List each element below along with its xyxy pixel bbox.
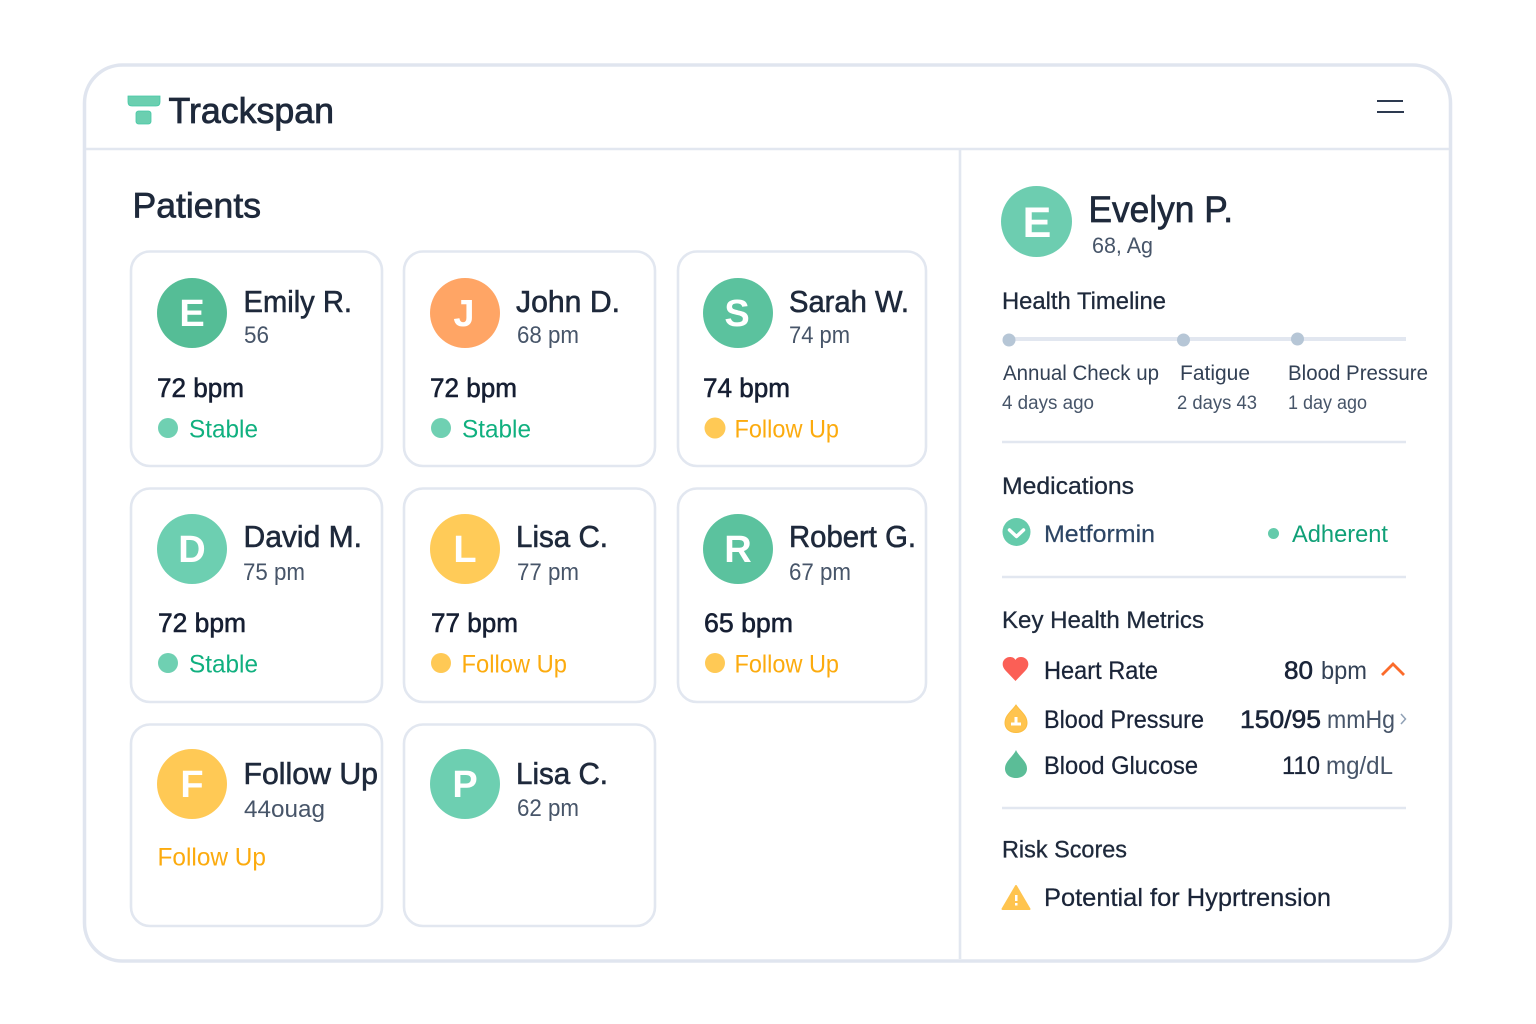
section: Medications: Metformin <box>1044 521 1155 548</box>
patient card: Lisa C.: 77 bpm <box>431 608 518 638</box>
patient card: David M. <box>131 488 382 702</box>
detail header: Evelyn P. <box>1001 186 1233 258</box>
section: Risk Scores <box>1002 836 1331 912</box>
patient card: Lisa C.: 77 pm <box>517 559 579 586</box>
patient card: Emily R.: Stable <box>189 416 258 444</box>
section: Risk Scores: Risk Scores <box>1002 836 1127 864</box>
avatar L: L <box>453 529 477 571</box>
section: Health Timeline: Fatigue <box>1180 361 1250 385</box>
patient card: Follow Up: Follow Up <box>158 844 266 872</box>
avatar E <box>157 278 227 348</box>
detail header: Evelyn P.: 68, Ag <box>1092 233 1153 258</box>
patient card: David M.: David M. <box>244 519 362 554</box>
metric: Blood Glucose: mg/dL <box>1326 752 1393 780</box>
section: Health Timeline: 2 days 43 <box>1177 393 1257 414</box>
avatar F: F <box>180 764 204 806</box>
metric: Blood Glucose: 110 <box>1282 752 1320 780</box>
metric: Blood Pressure: mmHg <box>1327 706 1395 734</box>
section: Medications <box>1002 473 1388 548</box>
avatar P <box>430 749 500 819</box>
heading: Patients: Patients <box>132 186 261 226</box>
section: Health Timeline: Annual Check up <box>1003 361 1159 385</box>
patient card: Robert G.: Robert G. <box>789 519 916 554</box>
patient card: Follow Up <box>131 724 382 926</box>
avatar R <box>703 514 773 584</box>
patient card: Follow Up: 44ouag <box>244 796 325 823</box>
icon: yellow drop <box>1005 705 1027 732</box>
patient card: John D.: John D. <box>516 284 620 319</box>
patient card: Emily R.: Emily R. <box>244 284 352 319</box>
icon: menu <box>1377 101 1404 112</box>
section: Key Health Metrics: Key Health Metrics <box>1002 607 1204 634</box>
patient card: Sarah W.: Sarah W. <box>789 284 909 319</box>
patient card: Lisa C. <box>404 488 655 702</box>
patient card: Sarah W.: 74 bpm <box>703 373 790 403</box>
avatar S <box>703 278 773 348</box>
patient card: Sarah W.: 74 pm <box>789 322 850 349</box>
patient card: John D. <box>404 252 655 466</box>
avatar S: S <box>724 293 750 335</box>
detail header: Evelyn P.: Evelyn P. <box>1088 189 1233 230</box>
app window frame <box>84 65 1450 961</box>
metric: Heart Rate <box>1003 657 1404 685</box>
timeline track <box>1002 332 1406 346</box>
patient card: Sarah W. <box>678 252 926 466</box>
patient card: John D.: 68 pm <box>517 322 579 349</box>
metric: Blood Glucose <box>1005 750 1393 780</box>
patient card: Lisa C.: Follow Up <box>462 650 567 678</box>
avatar E: E <box>179 293 205 335</box>
icon: heart <box>1003 657 1028 681</box>
patient card: Emily R. <box>131 252 382 466</box>
brand name: Trackspan <box>168 90 334 131</box>
patient card: Robert G. <box>678 488 926 702</box>
patient card: Robert G.: 65 bpm <box>704 608 793 638</box>
icon: warning triangle <box>1002 886 1030 909</box>
metric: Heart Rate: Heart Rate <box>1044 657 1158 685</box>
metric: Blood Pressure: 150/95 <box>1240 706 1321 734</box>
metric: Heart Rate: 80 <box>1284 657 1313 685</box>
metric: Blood Glucose: Blood Glucose <box>1044 752 1198 780</box>
section: Medications: Adherent <box>1292 521 1388 548</box>
metric: Blood Pressure: Blood Pressure <box>1044 706 1204 734</box>
section: Risk Scores: Potential for Hyprtrension <box>1044 884 1331 912</box>
section: Key Health Metrics <box>1002 607 1406 780</box>
patient card: Emily R.: 56 <box>244 322 269 349</box>
header <box>128 90 1404 131</box>
avatar D <box>157 514 227 584</box>
section: Health Timeline: Health Timeline <box>1002 288 1166 315</box>
section: Health Timeline: 4 days ago <box>1002 393 1094 414</box>
patient card: Lisa C. second <box>404 724 655 926</box>
section: Medications: Medications <box>1002 473 1134 500</box>
patient card: Lisa C. second: Lisa C. <box>516 756 608 791</box>
icon: check badge <box>1002 518 1030 546</box>
patient card: Follow Up: Follow Up <box>244 756 378 791</box>
patient card: John D.: 72 bpm <box>430 373 517 403</box>
icon: green drop <box>1005 750 1027 778</box>
patient card: John D.: Stable <box>462 416 531 444</box>
patient card: Sarah W.: Follow Up <box>734 416 839 444</box>
patient card: Lisa C.: Lisa C. <box>516 519 608 554</box>
patient card: Robert G.: 67 pm <box>789 559 851 586</box>
avatar R: R <box>724 529 752 571</box>
section: Health Timeline: 1 day ago <box>1288 393 1367 414</box>
avatar F <box>157 749 227 819</box>
avatar D: D <box>178 529 206 571</box>
patient card: Robert G.: Follow Up <box>734 650 839 678</box>
section: Health Timeline <box>1002 288 1428 414</box>
patient card: Lisa C. second: 62 pm <box>517 795 579 822</box>
metric: Heart Rate: bpm <box>1321 657 1367 685</box>
avatar L <box>430 514 500 584</box>
patient card: David M.: 75 pm <box>243 559 305 586</box>
avatar E large <box>1001 186 1072 257</box>
avatar J <box>430 278 500 348</box>
icon: Trackspan logo <box>128 96 160 124</box>
avatar E large: E <box>1023 199 1051 247</box>
patient card: Emily R.: 72 bpm <box>157 373 244 403</box>
avatar J: J <box>453 293 475 335</box>
patient card: David M.: Stable <box>189 650 258 678</box>
metric: Blood Pressure <box>1005 705 1406 734</box>
section: Health Timeline: Blood Pressure <box>1288 361 1428 385</box>
patient card: David M.: 72 bpm <box>158 608 246 638</box>
avatar P: P <box>452 764 478 806</box>
